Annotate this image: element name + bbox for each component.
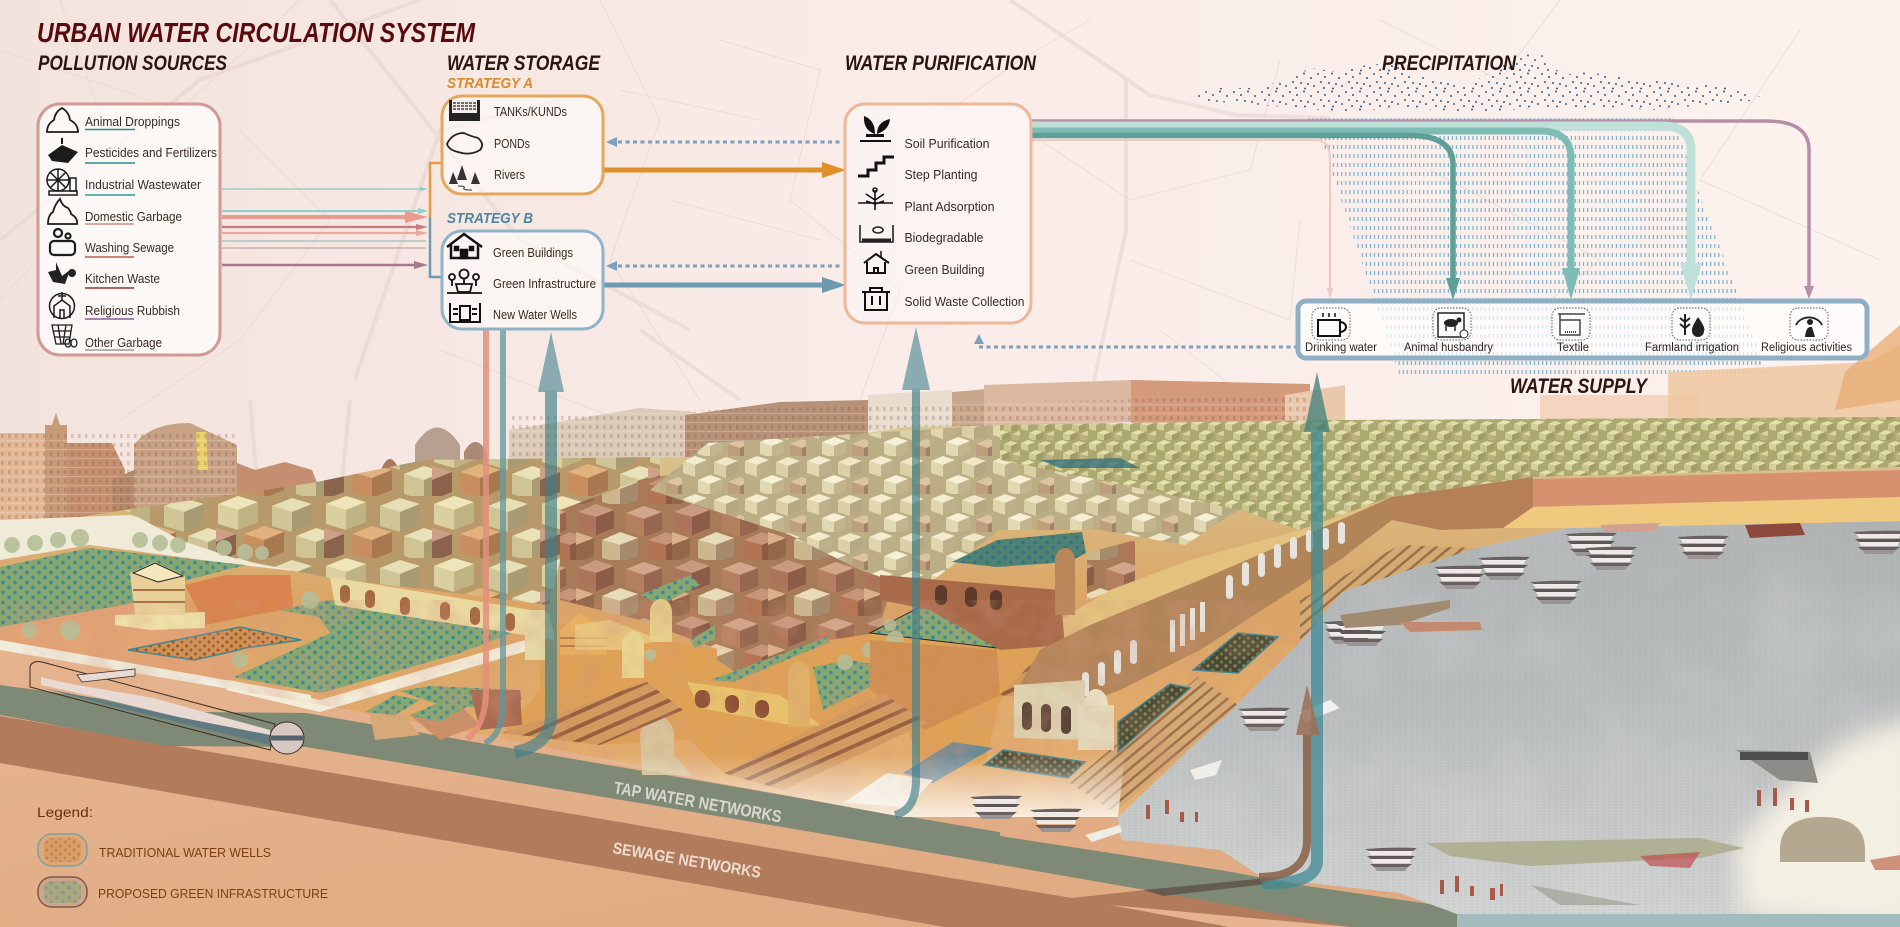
panel: water supply: Religious activities	[1761, 342, 1852, 354]
skyline buildings	[0, 325, 1900, 530]
panel: water supply: Drinking water	[1305, 342, 1377, 354]
arrow: strategy A to purification	[603, 162, 846, 178]
arrow: pale teal to farmland	[1032, 126, 1702, 300]
chhatri pavilion	[1014, 680, 1114, 750]
skyline windows	[0, 433, 237, 530]
panel: water purification: Step Planting	[904, 168, 978, 182]
foreground pagoda and towers	[525, 599, 692, 775]
arrow: purification feed	[895, 327, 930, 815]
arrow: dark teal to husbandry	[1032, 136, 1460, 300]
arrow: supply feed	[1262, 372, 1330, 883]
arrow: strategy B to purification	[603, 277, 846, 293]
storage brackets	[430, 163, 442, 277]
arrow: storage feed	[515, 332, 564, 752]
panel: water purification: Biodegradable	[904, 231, 984, 245]
panel: water supply	[1298, 301, 1867, 358]
icon: drinking water	[1312, 308, 1350, 340]
panel: pollution sources: Washing Sewage	[85, 241, 174, 255]
arrow: mid teal to textile	[1032, 131, 1580, 300]
city blocks: brown wedge	[1087, 540, 1135, 600]
arrow: pink to drinking water	[1032, 140, 1333, 299]
parks: proposed green infrastructure	[0, 532, 1086, 710]
panel: strategy A storage	[442, 96, 603, 194]
panel: strategy B storage: New Water Wells	[493, 308, 577, 322]
city land	[0, 417, 1900, 817]
bottom fade of city	[540, 745, 1125, 817]
panel: water purification: Plant Adsorption	[904, 200, 995, 214]
terrace ground	[503, 497, 1392, 773]
ground strata	[0, 640, 1460, 927]
city blocks: beige zone	[125, 457, 660, 605]
arrow: sewage return	[1259, 685, 1320, 877]
rain hatch	[1305, 113, 1768, 377]
item labels: Animal Droppings	[85, 115, 180, 129]
dotted return supply	[974, 334, 1296, 347]
city blocks: small	[1000, 417, 1900, 530]
heading: strategy A: STRATEGY A	[447, 75, 533, 92]
icon: solid waste	[862, 288, 890, 310]
icon: farmland irrigation	[1672, 308, 1710, 340]
arrow: purple to religious activities	[1032, 121, 1814, 299]
heading: strategy B: STRATEGY B	[447, 210, 533, 227]
small green-top boxes	[365, 690, 522, 740]
icon: basket	[52, 325, 77, 347]
icon: tanks	[449, 100, 480, 121]
city blocks: medium	[650, 425, 1300, 590]
icon: plant adsorption	[858, 188, 893, 210]
coloured boats	[1085, 523, 1900, 905]
ghat wall with arches	[1014, 497, 1392, 705]
heading: water storage: WATER STORAGE	[447, 52, 601, 75]
icon: soil purification	[860, 116, 891, 142]
panel: water supply: Animal husbandry	[1404, 342, 1493, 354]
legend swatch: green infrastructure	[38, 877, 87, 907]
panel: strategy A storage: PONDs	[494, 137, 530, 151]
icon: animal droppings	[47, 108, 78, 132]
icon: rivers	[449, 165, 480, 190]
moored boats	[970, 531, 1900, 871]
mottled surface texture	[0, 600, 1280, 790]
dotted return A	[606, 137, 842, 147]
legend	[37, 804, 328, 907]
icon: washing	[50, 229, 75, 255]
trees	[4, 529, 904, 670]
panel: water supply: Textile	[1557, 342, 1589, 354]
icon: kitchen waste	[48, 262, 76, 284]
pipe cross section	[30, 662, 304, 754]
panel: pollution sources	[38, 104, 220, 355]
legend: Legend:	[37, 804, 93, 820]
panel: pollution sources: Pesticides and Fertilizers	[85, 146, 217, 160]
pollution arrows	[222, 187, 428, 269]
heading: water purification: WATER PURIFICATION	[845, 52, 1037, 75]
panel: pollution sources: Kitchen Waste	[85, 272, 160, 286]
panel: water purification: Soil Purification	[904, 137, 990, 151]
icon: green infrastructure	[447, 270, 482, 293]
dotted return B	[606, 261, 842, 271]
icon: animal husbandry	[1433, 308, 1471, 340]
temple and orange blocks	[115, 562, 293, 630]
sewage label: SEWAGE NETWORKS	[611, 840, 762, 882]
traditional well	[128, 627, 301, 660]
icon: religious	[50, 292, 74, 318]
water supply bottom bar	[1457, 914, 1900, 927]
vertical pipes and arrows	[467, 327, 1330, 883]
icon: green building	[864, 251, 889, 273]
panel: pollution sources: Other Garbage	[85, 336, 162, 350]
panel: pollution sources: Domestic Garbage	[85, 210, 182, 224]
title: URBAN WATER CIRCULATION SYSTEM	[37, 17, 476, 48]
bathers	[1146, 788, 1809, 900]
panel: water purification: Green Building	[904, 263, 985, 277]
icon: new water wells	[450, 303, 480, 322]
panel: pollution sources: Religious Rubbish	[85, 304, 180, 318]
panel: strategy B storage: Green Buildings	[493, 246, 573, 260]
panel: strategy B storage	[442, 231, 603, 329]
pools and channel	[843, 458, 1278, 807]
river	[1100, 520, 1900, 927]
legend: TRADITIONAL WATER WELLS	[99, 845, 271, 860]
yellow arcade	[687, 661, 823, 727]
icon: industrial	[47, 169, 77, 195]
icon: textile	[1552, 308, 1590, 340]
icon: green buildings	[447, 234, 482, 258]
panel: strategy B storage: Green Infrastructure	[493, 277, 596, 291]
city blocks: brown zone	[560, 470, 900, 650]
tap water label: TAP WATER NETWORKS	[612, 778, 783, 826]
arcade	[330, 577, 555, 640]
panel: water supply: Farmland irrigation	[1645, 342, 1739, 354]
icon: ponds	[447, 133, 482, 154]
legend: PROPOSED GREEN INFRASTRUCTURE	[98, 886, 328, 901]
outflow arrows to supply	[1032, 121, 1814, 300]
icon: pesticides	[48, 138, 78, 163]
icon: biodegradable	[860, 225, 893, 242]
legend swatch: wells	[38, 834, 87, 866]
panel: strategy A storage: TANKs/KUNDs	[494, 105, 567, 119]
panel: water purification	[845, 104, 1031, 323]
panel: strategy A storage: Rivers	[494, 168, 525, 182]
icon: religious activities	[1790, 308, 1828, 340]
heading: pollution sources: POLLUTION SOURCES	[38, 52, 227, 75]
icon: step planting	[858, 157, 894, 176]
heading: precipitation: PRECIPITATION	[1382, 52, 1517, 75]
terracotta arcade	[870, 548, 1075, 730]
panel: pollution sources: Industrial Wastewater	[85, 178, 201, 192]
panel: water purification: Solid Waste Collection	[904, 295, 1025, 309]
foreground stairs	[503, 545, 1476, 813]
precipitation cloud dots	[1193, 53, 1764, 112]
icon: garbage	[48, 199, 77, 224]
heading: water supply: WATER SUPPLY	[1510, 375, 1649, 398]
